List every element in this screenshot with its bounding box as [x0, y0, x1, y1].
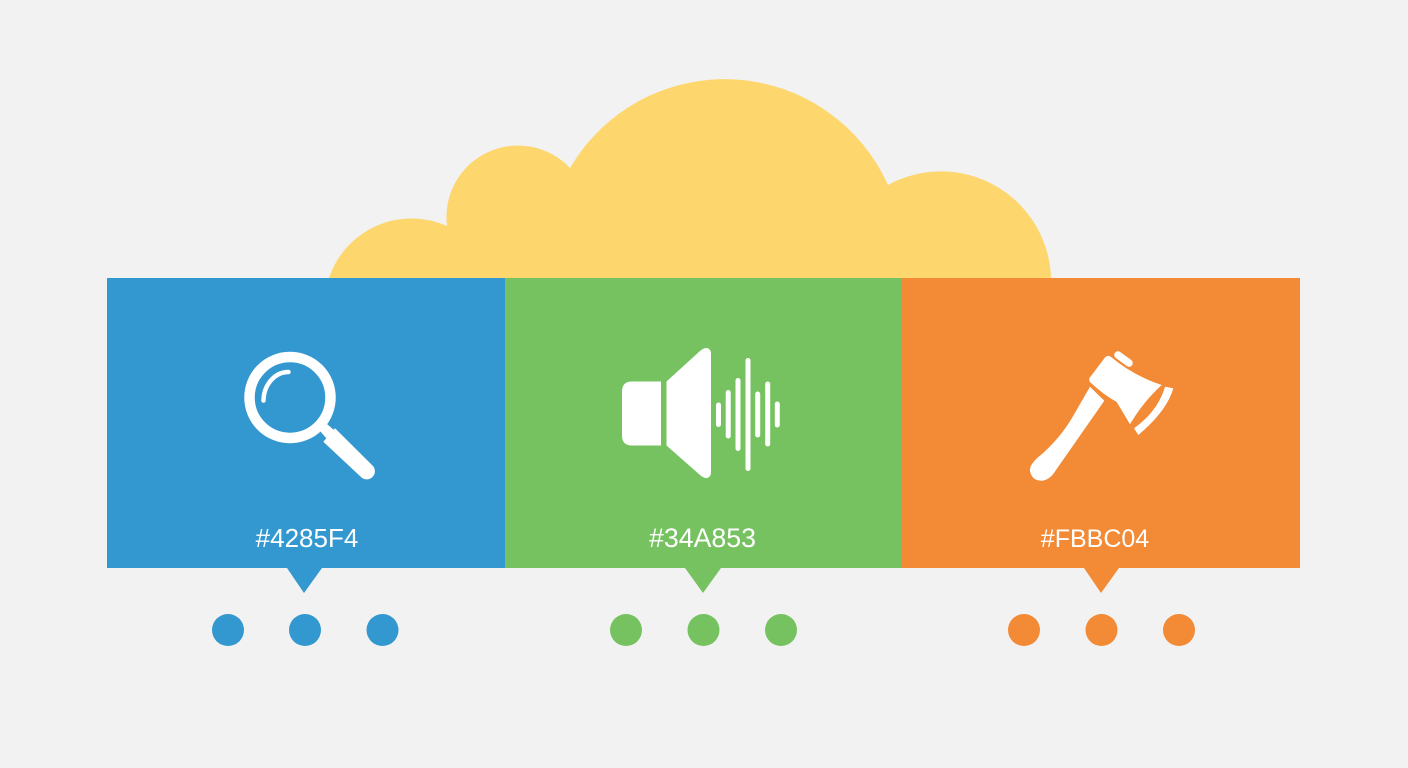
- icon: speaker with sound wave: [622, 348, 780, 478]
- dots: green: [610, 614, 797, 646]
- cloud: [329, 79, 1051, 278]
- label: hex code: #4285F4: [256, 523, 358, 553]
- label: hex code: #FBBC04: [1041, 525, 1149, 553]
- icon: axe: [1030, 355, 1173, 481]
- label: hex code: #34A853: [649, 523, 756, 553]
- panel: orange: [902, 278, 1300, 593]
- panel background with pointer: [505, 278, 902, 593]
- dots: orange: [1008, 614, 1195, 646]
- panel background with pointer: [107, 278, 505, 593]
- panel: blue: [107, 278, 505, 593]
- panel: green: [505, 278, 902, 593]
- panel background with pointer: [902, 278, 1300, 593]
- dots: blue: [212, 614, 398, 646]
- icon: magnifying glass: [250, 357, 375, 479]
